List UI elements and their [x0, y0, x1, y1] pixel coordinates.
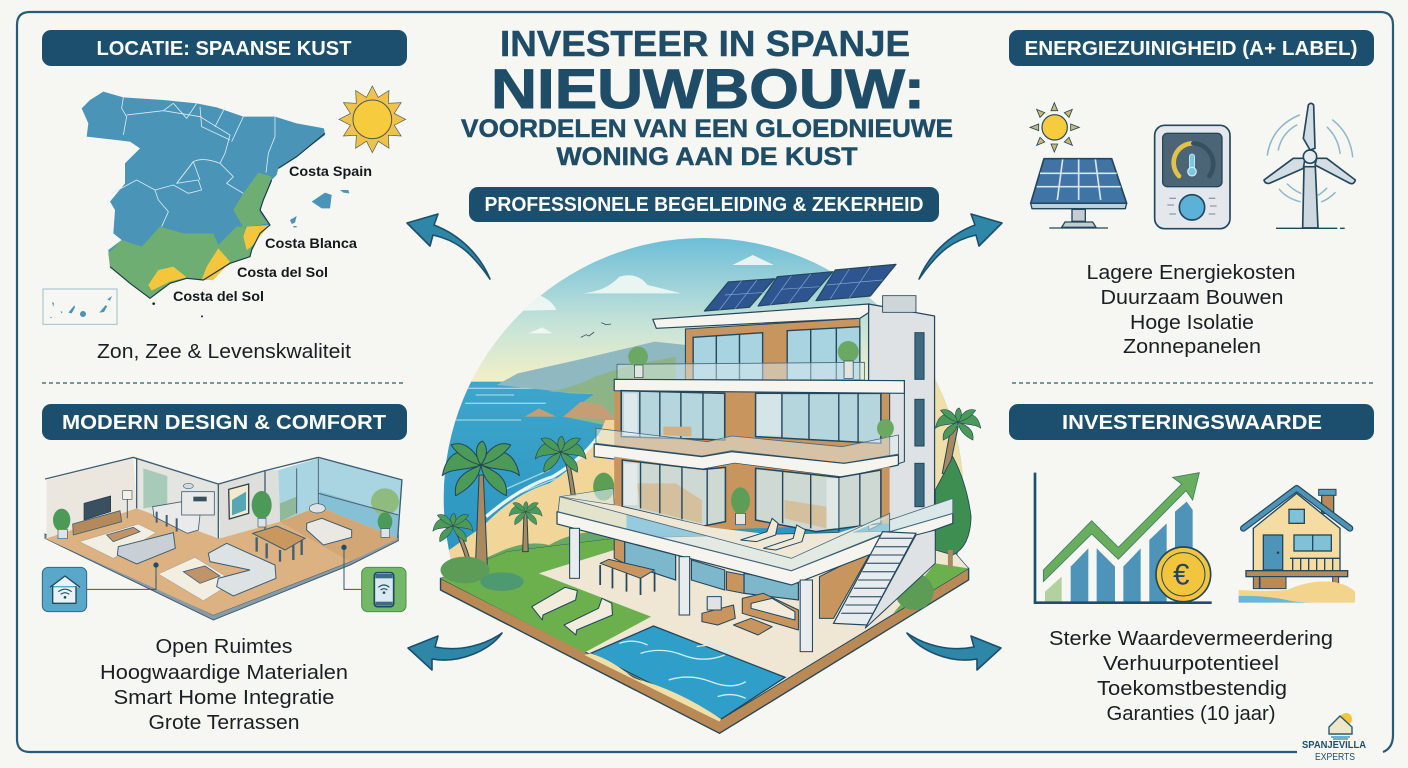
tower [869, 304, 935, 530]
energy icons [1030, 103, 1355, 229]
columns [570, 528, 579, 578]
icon: smart home [42, 567, 87, 612]
heading: modern design: MODERN DESIGN & COMFORT [62, 412, 386, 434]
list: investering: Verhuurpotentieel [1103, 653, 1279, 675]
third floor [614, 457, 890, 530]
arrow: to investering [907, 633, 1001, 670]
list: modern design: Smart Home Integratie [114, 687, 334, 709]
furniture: tv [84, 496, 111, 520]
panel: modern design [42, 404, 407, 734]
icon: sun [339, 86, 406, 153]
logo: spanjevilla experts [1302, 713, 1366, 763]
inset: canary islands [43, 289, 117, 324]
icon: sun with solar panel [1030, 103, 1127, 228]
arrow: to design [408, 633, 502, 670]
chart: growth [1035, 473, 1212, 603]
caption: zon, zee: Zon, Zee & Levenskwaliteit [97, 341, 351, 363]
list: modern design: Open Ruimtes [156, 636, 292, 658]
list: energie: Duurzaam Bouwen [1100, 287, 1284, 309]
arrow: to locatie [407, 214, 490, 279]
backdrop: sky and sea [444, 238, 963, 560]
title [461, 23, 953, 171]
patio furniture [532, 559, 798, 635]
list: energie: Zonnepanelen [1123, 336, 1261, 358]
heading: locatie [42, 30, 407, 66]
map labels [173, 163, 372, 304]
second floor [614, 390, 890, 467]
logo: spanjevilla experts: SPANJEVILLA [1302, 740, 1366, 751]
icon: smartphone [362, 567, 406, 612]
banner: professionele begeleiding: PROFESSIONELE BEGELEIDING & ZEKERHEID [484, 194, 924, 216]
heading: energiezuinigheid [1009, 30, 1374, 66]
solar panels [704, 264, 896, 311]
icon: euro coin: € [1173, 559, 1189, 592]
map labels: Costa del Sol [237, 264, 328, 280]
list: modern design [100, 636, 348, 734]
illustration: floor plan [42, 457, 406, 620]
list: modern design: Grote Terrassen [148, 712, 300, 734]
map labels: Costa Blanca [265, 235, 357, 251]
investment icons [1035, 473, 1355, 603]
icon: euro coin [1156, 547, 1211, 602]
panel: locatie [42, 30, 407, 363]
icon: thermostat [1155, 125, 1230, 229]
list: modern design: Hoogwaardige Materialen [100, 662, 348, 684]
panel: investeringswaarde [1009, 404, 1374, 725]
list: investering: Garanties (10 jaar) [1106, 703, 1276, 725]
second balcony [596, 428, 898, 463]
title: VOORDELEN VAN EEN GLOEDNIEUWE [461, 115, 953, 143]
pool [591, 626, 785, 719]
list: energie: Lagere Energiekosten [1086, 262, 1296, 284]
terrace slab and glass [557, 512, 953, 585]
icon: beach house [1239, 488, 1355, 603]
heading: energiezuinigheid: ENERGIEZUINIGHEID (A+ LABEL) [1024, 38, 1358, 60]
ground floor [819, 550, 872, 618]
top floor [685, 318, 860, 380]
loungers on terrace [741, 518, 805, 550]
panel: energiezuinigheid [1009, 30, 1374, 358]
ground platform [441, 530, 969, 733]
logo: spanjevilla experts: EXPERTS [1315, 752, 1355, 763]
palm trees [433, 408, 981, 610]
map labels: Costa Spain [289, 163, 372, 179]
map labels: Costa del Sol [173, 288, 264, 304]
illustration: central house [430, 237, 981, 733]
heading: investeringswaarde [1009, 404, 1374, 440]
building [557, 264, 953, 652]
title: INVESTEER IN SPANJE [500, 23, 910, 64]
map of Spain [43, 86, 406, 324]
heading: locatie: LOCATIE: SPAANSE KUST [96, 38, 352, 60]
staircase [865, 530, 935, 628]
heading: investeringswaarde: INVESTERINGSWAARDE [1062, 412, 1322, 434]
title: NIEUWBOUW: [491, 57, 925, 120]
banner: professionele begeleiding [469, 187, 939, 222]
terrace floor [560, 497, 890, 558]
list: investering: Sterke Waardevermeerdering [1049, 628, 1333, 650]
list: investering [1049, 628, 1333, 725]
list: investering: Toekomstbestendig [1097, 678, 1287, 700]
list: energie [1086, 262, 1296, 358]
list: energie: Hoge Isolatie [1130, 312, 1254, 334]
title: WONING AAN DE KUST [556, 143, 858, 171]
connector lines [87, 547, 362, 589]
icon: wind turbine [1264, 103, 1355, 228]
heading: modern design [42, 404, 407, 440]
arrow: to energie [919, 214, 1002, 279]
